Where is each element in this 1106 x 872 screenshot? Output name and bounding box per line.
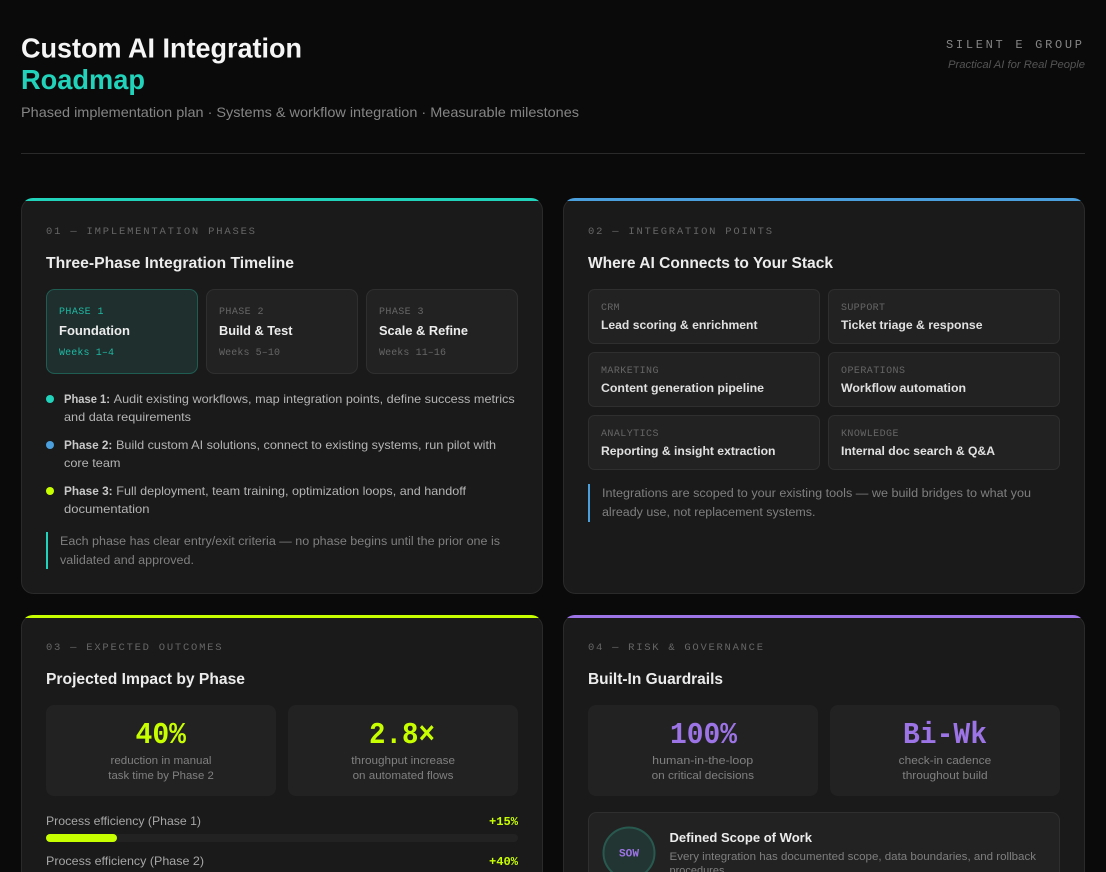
cell: marketing: MARKETING xyxy=(601,366,658,377)
cell: knowledge: Internal doc search & Q&A xyxy=(841,444,995,458)
bullet: phase 1 xyxy=(46,392,515,424)
bar: process efficiency phase 1: +15% xyxy=(489,816,518,829)
note: already use, not replacement systems. xyxy=(602,507,816,519)
card description xyxy=(670,851,1037,872)
cell: knowledge xyxy=(828,416,1060,470)
heading: Built-In Guardrails xyxy=(588,671,723,688)
stat: 40%: 40% xyxy=(136,718,186,753)
title: Custom AI Integration xyxy=(21,32,302,64)
stat: bi-weekly: throughout build xyxy=(902,770,988,782)
card: defined scope of work xyxy=(588,812,1060,872)
bullet: phase 2: core team xyxy=(64,456,120,470)
phase card 3 xyxy=(366,290,518,374)
phase card 1 xyxy=(46,290,198,374)
icon: SOW badge xyxy=(604,828,654,872)
stat: 40%: task time by Phase 2 xyxy=(108,770,214,782)
phase card 1: PHASE 1 xyxy=(59,307,104,318)
cell: CRM: CRM xyxy=(601,303,620,314)
phase card 3: Weeks 11–16 xyxy=(379,347,446,359)
bullet: phase 3: Phase 3: xyxy=(64,484,113,498)
note: Integrations are scoped to your existing tools — we build bridges to what you xyxy=(602,488,1031,500)
subtitle: Phased implementation plan · Systems & workflow integration · Measurable milestones xyxy=(21,104,579,120)
section label: 03 — EXPECTED OUTCOMES xyxy=(46,642,222,654)
phase card 2 xyxy=(206,290,358,374)
cell: knowledge: KNOWLEDGE xyxy=(841,429,898,440)
cell: operations: Workflow automation xyxy=(841,381,966,395)
bullet: phase 3: Full deployment, team training, optimization loops, and handoff xyxy=(116,484,467,498)
note xyxy=(588,484,1031,522)
bullet: phase 3 xyxy=(46,484,467,516)
bar: process efficiency phase 2: +40% xyxy=(489,856,518,869)
cell: marketing: Content generation pipeline xyxy=(601,381,764,395)
bullet: phase 3: documentation xyxy=(64,502,150,516)
brand block: SILENT E GROUP xyxy=(946,38,1082,52)
panel: implementation phases xyxy=(21,198,543,594)
stat: 100%: 100% xyxy=(670,718,737,753)
card title: Defined Scope of Work xyxy=(670,830,813,845)
title: Roadmap xyxy=(21,64,145,95)
bar: process efficiency phase 2 xyxy=(46,854,518,869)
phase card 3: PHASE 3 xyxy=(379,307,424,318)
cell: analytics: Reporting & insight extraction xyxy=(601,444,776,458)
cell: marketing xyxy=(588,352,820,406)
cell: analytics: ANALYTICS xyxy=(601,429,658,440)
cell: support xyxy=(828,290,1060,344)
phase card 2: Weeks 5–10 xyxy=(219,347,280,359)
stat: 100%: on critical decisions xyxy=(652,770,755,782)
stat: 40%: reduction in manual xyxy=(110,755,212,767)
bar: process efficiency phase 1: Process efficiency (Phase 1) xyxy=(46,814,201,828)
cell: operations xyxy=(828,352,1060,406)
cell: analytics xyxy=(588,416,820,470)
panel: integration points xyxy=(563,198,1085,594)
cell: support: Ticket triage & response xyxy=(841,318,983,332)
bullet: phase 2: Build custom AI solutions, connect to existing systems, run pilot with xyxy=(116,438,496,452)
heading: Projected Impact by Phase xyxy=(46,671,245,688)
cell: support: SUPPORT xyxy=(841,303,885,314)
stat: bi-weekly: check-in cadence xyxy=(899,755,991,767)
panel: risk and governance xyxy=(563,615,1085,872)
phase card 2: Build & Test xyxy=(219,323,293,338)
stat: bi-weekly xyxy=(830,705,1060,796)
phase card 1: Foundation xyxy=(59,323,130,338)
stat: 2.8x xyxy=(288,705,518,796)
bullet: phase 1: and data requirements xyxy=(64,410,191,424)
phase card 1: Weeks 1–4 xyxy=(59,347,114,359)
stat: 2.8x: throughput increase xyxy=(351,755,455,767)
brand block: Practical AI for Real People xyxy=(948,59,1085,71)
stat: bi-weekly: Bi-Wk xyxy=(903,718,987,753)
note xyxy=(46,532,500,569)
heading: Where AI Connects to Your Stack xyxy=(588,255,833,272)
icon: SOW badge: SOW xyxy=(619,848,639,860)
note: validated and approved. xyxy=(60,555,194,567)
bullet: phase 2 xyxy=(46,438,496,470)
brand block xyxy=(946,38,1085,71)
cell: operations: OPERATIONS xyxy=(841,366,905,377)
heading: Three-Phase Integration Timeline xyxy=(46,255,294,272)
bullet: phase 2: Phase 2: xyxy=(64,438,112,452)
section label: 04 — RISK & GOVERNANCE xyxy=(588,642,763,654)
section label: 01 — IMPLEMENTATION PHASES xyxy=(46,226,255,238)
stat: 40% xyxy=(46,705,276,796)
bar: process efficiency phase 1 xyxy=(46,814,518,842)
panel: expected outcomes xyxy=(21,615,543,872)
bar: process efficiency phase 2: Process efficiency (Phase 2) xyxy=(46,854,204,868)
section label: 02 — INTEGRATION POINTS xyxy=(588,226,772,238)
bullet: phase 1: Phase 1: xyxy=(64,392,110,406)
phase card 2: PHASE 2 xyxy=(219,307,264,318)
cell: CRM xyxy=(588,290,820,344)
title xyxy=(21,32,302,95)
stat: 2.8x: 2.8× xyxy=(369,718,435,753)
cell: CRM: Lead scoring & enrichment xyxy=(601,318,758,332)
stat: 100%: human-in-the-loop xyxy=(652,755,753,767)
stat: 2.8x: on automated flows xyxy=(353,770,454,782)
phase card 3: Scale & Refine xyxy=(379,323,468,338)
bullet: phase 1: Audit existing workflows, map integration points, define success metrics xyxy=(114,392,515,406)
note: Each phase has clear entry/exit criteria — no phase begins until the prior one is xyxy=(60,536,500,548)
stat: 100% xyxy=(588,705,818,796)
card description: Every integration has documented scope, data boundaries, and rollback xyxy=(670,851,1037,863)
